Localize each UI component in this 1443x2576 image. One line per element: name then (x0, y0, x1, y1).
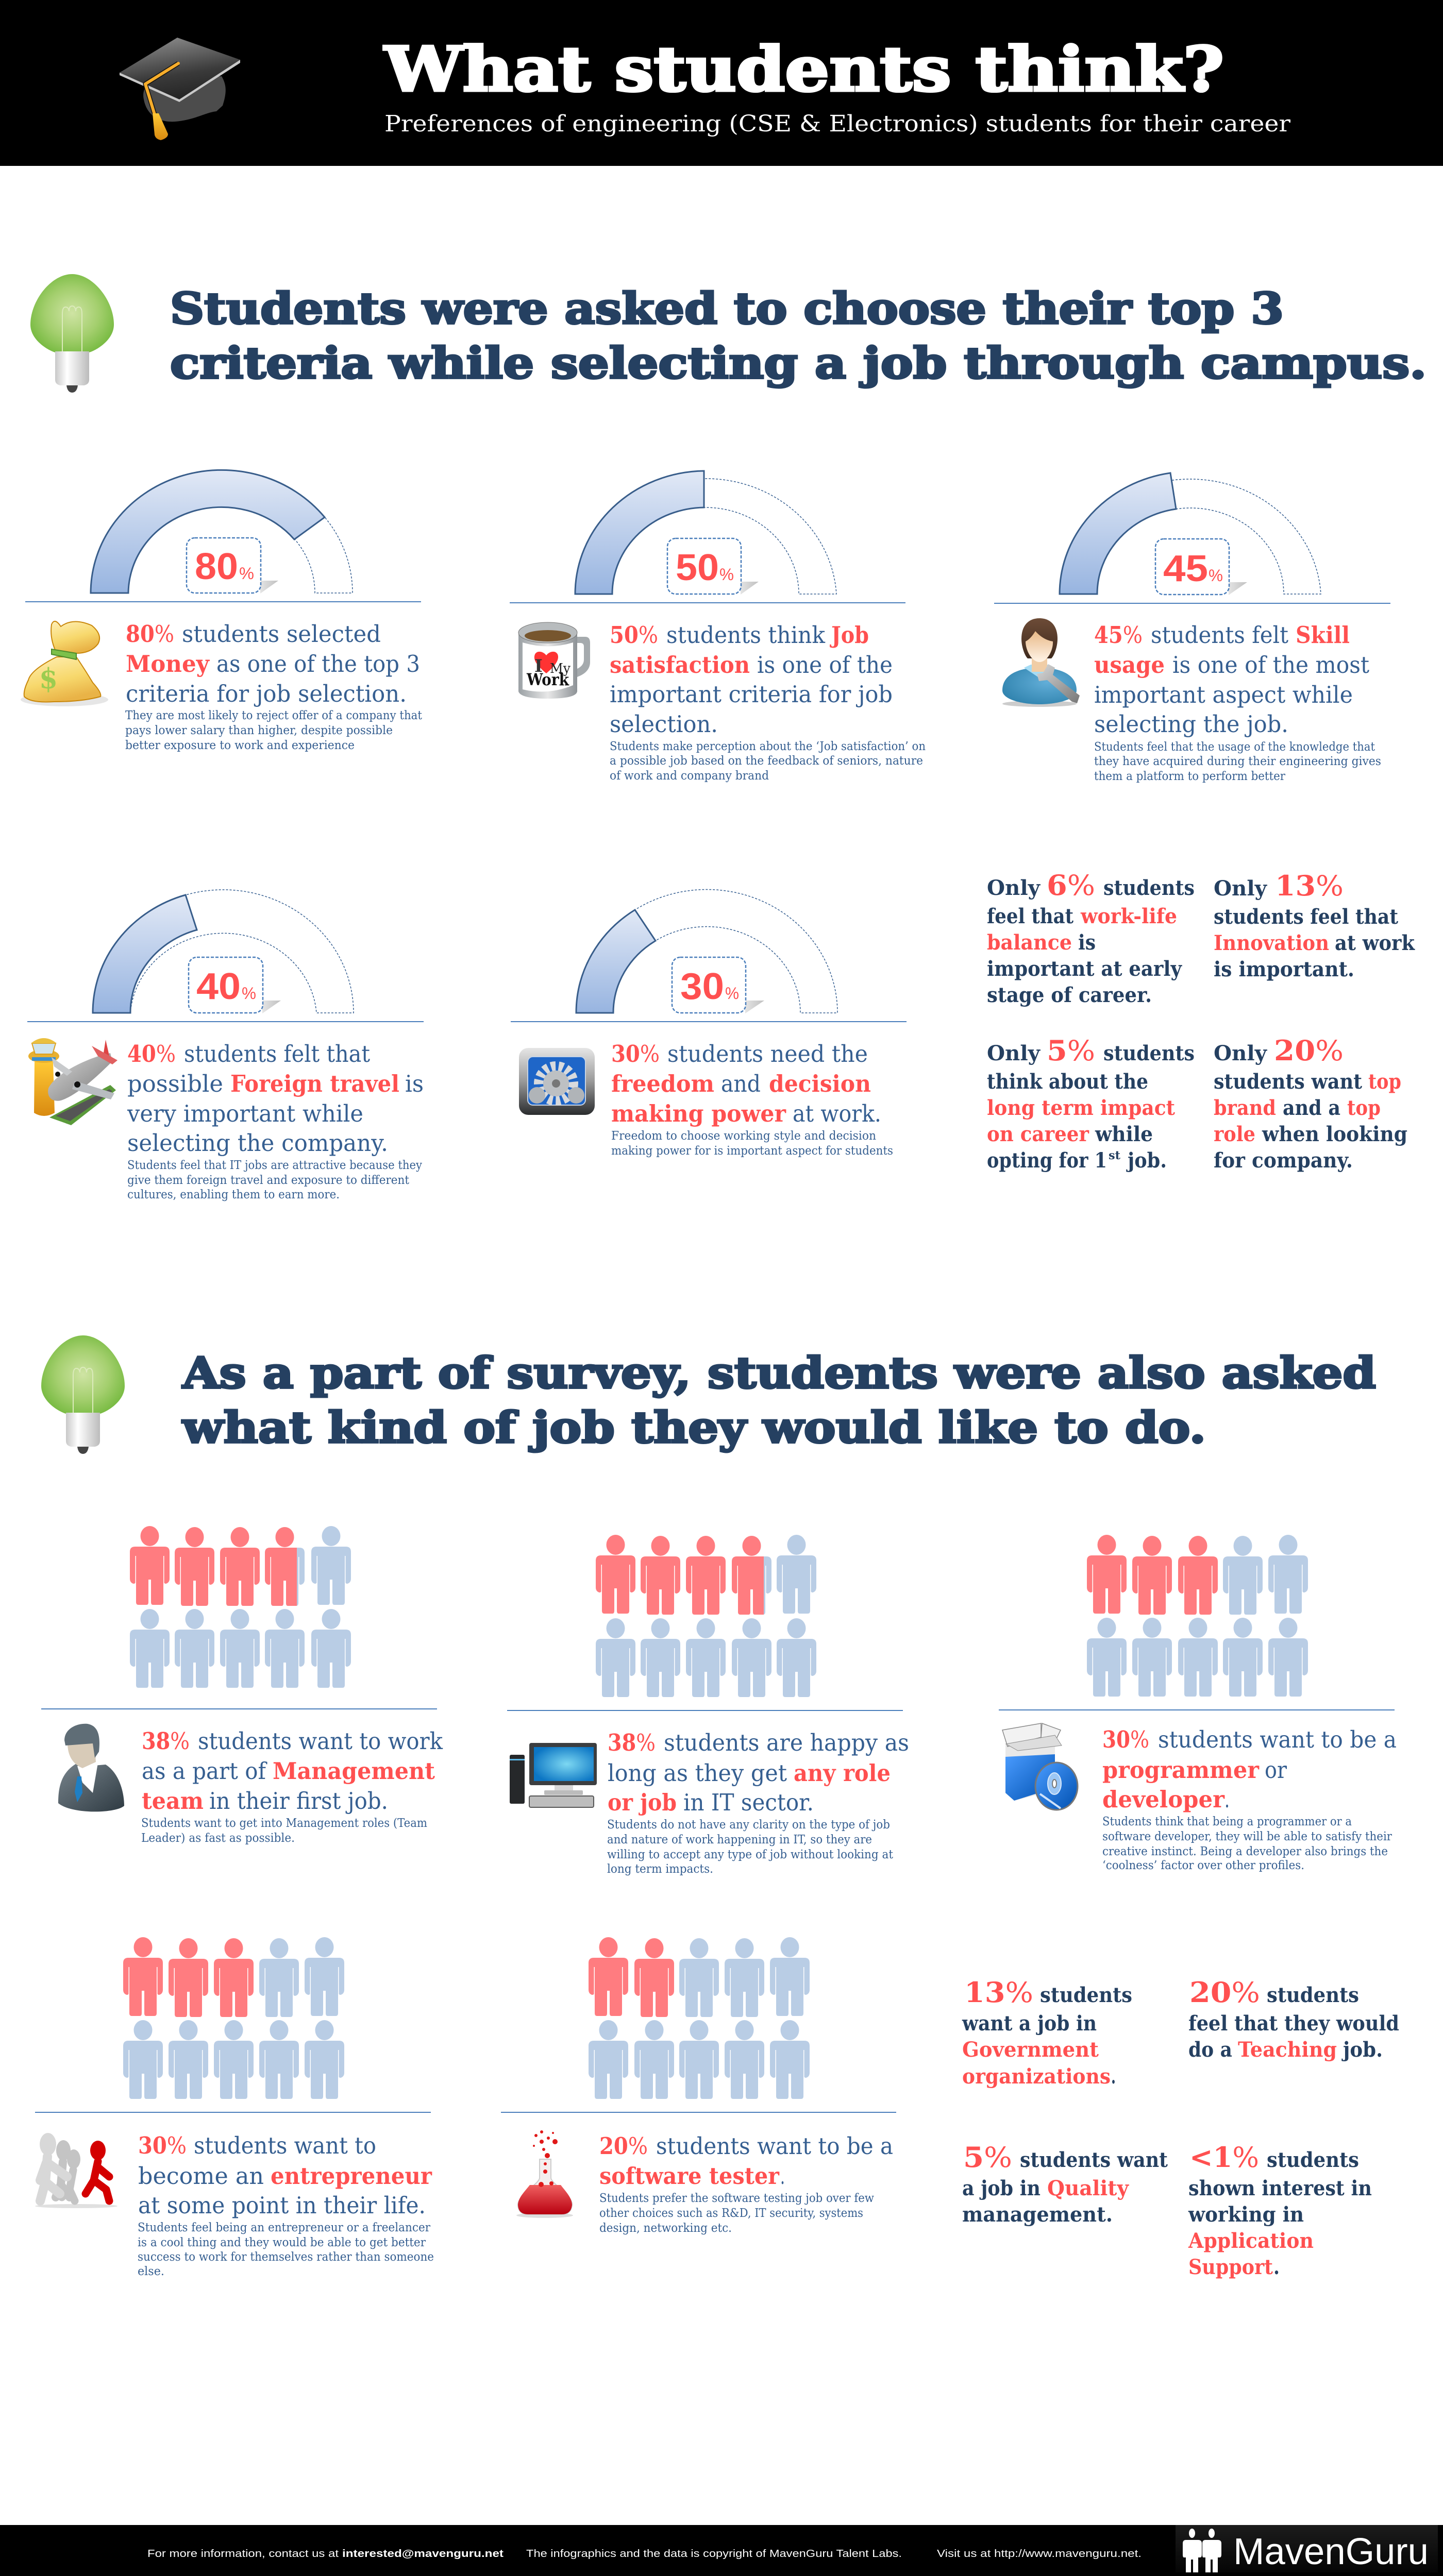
stat: 13% innovation: at work (1335, 931, 1415, 955)
text: 40% foreign travel: selecting the company. (127, 1129, 388, 1157)
title: What students think? (383, 33, 1224, 106)
text: 50% job satisfaction: satisfaction (610, 651, 750, 679)
pictogram 38% (130, 1526, 351, 1688)
text: 38% any role: Students do not have any clarity on the type of job (607, 1818, 890, 1832)
gauge 45%: % (1209, 566, 1223, 585)
text: 20% software tester: software tester (599, 2162, 780, 2190)
text: 38% management: students want to work (198, 1727, 443, 1755)
text: 80% money: pays lower salary than higher, despite possible (125, 724, 393, 737)
text: 80% money: Money (126, 650, 210, 677)
panel: skill usage 45% (994, 473, 1390, 783)
stat: under 1% application support: <1% (1189, 2141, 1259, 2174)
text: 38% any role: students are happy as (664, 1729, 909, 1756)
stat: 5% quality: management. (962, 2202, 1113, 2227)
gauge 80%: 80 (195, 546, 238, 587)
footer contact text: For more information, contact us at (147, 2548, 339, 2560)
text: 38% management: 38% (142, 1727, 190, 1755)
text: 80% money: They are most likely to reject offer of a company that (125, 709, 423, 722)
text: 40% foreign travel: very important while (127, 1100, 363, 1127)
text: 80% money: as one of the top 3 (216, 650, 420, 677)
icon: airplane and control tower (28, 1038, 118, 1125)
text: 30% programmer: programmer (1102, 1756, 1260, 1784)
text: 45% skill usage: they have acquired during their engineering gives (1094, 755, 1381, 768)
stat: 5% quality (962, 2141, 1168, 2227)
stat: under 1% application support: Application (1188, 2229, 1314, 2253)
text: 30% entrepreneur: 30% (138, 2132, 187, 2159)
stat: 20% teaching (1188, 1976, 1399, 2062)
text: 30% programmer: students want to be a (1158, 1726, 1397, 1753)
stat: 6% work-life balance: is (1078, 930, 1096, 955)
footer band (0, 2525, 1443, 2576)
pictogram 30% (1087, 1535, 1308, 1697)
stat: 20% teaching: students (1267, 1983, 1359, 2007)
stat: 5% long term impact: think about the (987, 1070, 1148, 1094)
panel: any role 38% (507, 1535, 909, 1876)
panel: freedom 30% (511, 890, 907, 1158)
stat: 13% innovation: is important. (1214, 957, 1354, 981)
heading text: what kind of job they would like to do. (182, 1402, 1206, 1453)
stat: 13% innovation: Only (1214, 876, 1268, 901)
text: 45% skill usage: Students feel that the usage of the knowledge that (1094, 740, 1375, 754)
stat: under 1% application support (1188, 2141, 1372, 2279)
text: 38% any role: in IT sector. (683, 1789, 814, 1816)
text: 50% job satisfaction: 50% (610, 621, 658, 649)
stat: 6% work-life balance: work-life (1080, 904, 1177, 928)
text: 30% entrepreneur: Students feel being an entrepreneur or a freelancer (138, 2221, 430, 2234)
stat: 5% long term impact: Only (987, 1041, 1041, 1065)
gauge 30% (576, 890, 837, 1013)
text: 30% programmer: software developer, they will be able to satisfy their (1102, 1830, 1392, 1843)
icon: coffee mug (518, 622, 590, 699)
stat: 5% long term impact: opting for 1 (987, 1148, 1107, 1173)
panel: job satisfaction 50% (510, 471, 926, 783)
text: 50% job satisfaction: is one of the (757, 651, 893, 679)
heading text (170, 283, 1427, 388)
text: 30% programmer: creative instinct. Being a developer also brings the (1102, 1845, 1388, 1858)
panel: money 80% (21, 470, 423, 752)
text: 38% management: Management (273, 1757, 435, 1785)
text: 45% skill usage: students felt (1151, 621, 1288, 649)
text: 50% job satisfaction: Job (829, 621, 869, 649)
text: 38% management: as a part of (142, 1757, 267, 1785)
stat: 6% work-life balance: 6% (1047, 869, 1095, 902)
panel: foreign travel 40% (27, 890, 424, 1201)
stat: 6% work-life balance: feel that (987, 904, 1073, 928)
text: 30% entrepreneur: students want to (194, 2132, 376, 2159)
text: 38% any role: or job (608, 1789, 677, 1816)
text: 30% freedom: 30% (611, 1040, 660, 1067)
text: 38% any role: any role (794, 1759, 891, 1787)
section heading: criteria (30, 274, 1427, 393)
heading text: criteria while selecting a job through campus. (170, 338, 1427, 388)
text: 40% foreign travel: 40% (127, 1040, 176, 1067)
stat: 13% government: want a job in (962, 2011, 1097, 2036)
text: 38% any role: and nature of work happening in IT, so they are (607, 1833, 872, 1846)
text: 30% programmer: . (1224, 1786, 1230, 1813)
gauge 50% (575, 471, 836, 595)
footer contact text (147, 2548, 504, 2560)
text: 30% programmer (1102, 1726, 1397, 1872)
stat: 20% top brand: top (1368, 1070, 1401, 1094)
text: 30% entrepreneur: entrepreneur (271, 2162, 432, 2190)
icon: chemical flask (516, 2130, 573, 2218)
text: 38% management: team (142, 1787, 204, 1815)
stat: 20% top brand: brand (1214, 1096, 1276, 1120)
icon: graduation cap (120, 38, 240, 140)
stat: 5% long term impact (987, 1034, 1195, 1173)
text: 20% software tester: Students prefer the software testing job over few (599, 2192, 874, 2205)
icon: green light bulb (41, 1335, 125, 1454)
stat: 20% top brand: 20% (1274, 1034, 1344, 1067)
icon: coffee mug: Work (526, 670, 569, 689)
stat: under 1% application support: students (1267, 2148, 1359, 2172)
text: 20% software tester: . (780, 2162, 785, 2190)
text: 80% money: 80% (126, 620, 174, 648)
text: 20% software tester (599, 2132, 893, 2235)
text: 40% foreign travel: Students feel that IT jobs are attractive because they (127, 1159, 422, 1172)
text: 40% foreign travel: Foreign travel (230, 1070, 399, 1097)
text: 30% entrepreneur: at some point in their life. (138, 2192, 426, 2219)
gauge 50%: 50 (676, 547, 719, 588)
text: 45% skill usage: Skill (1296, 621, 1350, 649)
text: 20% software tester: other choices such as R&D, IT security, systems (599, 2207, 863, 2220)
stat: 5% long term impact: on career (987, 1122, 1089, 1146)
text: 30% freedom: Freedom to choose working style and decision (611, 1129, 876, 1143)
icon: coffee mug: I (534, 656, 543, 676)
icon: manager in suit (58, 1724, 124, 1811)
text: 38% management: in their first job. (209, 1787, 388, 1815)
footer contact text: interested@mavenguru.net (342, 2548, 504, 2560)
text: 30% programmer: Students think that being a programmer or a (1102, 1815, 1352, 1828)
text: 30% programmer: developer (1102, 1786, 1225, 1813)
section heading: kind of job (41, 1335, 1376, 1454)
icon: person with wrench (1002, 618, 1080, 707)
panel: management 38% (41, 1526, 443, 1845)
text: 38% management (141, 1727, 443, 1845)
stat: 20% teaching: feel that they would (1188, 2011, 1399, 2036)
text: 80% money: students selected (182, 620, 381, 648)
stat: 20% top brand: when looking (1262, 1122, 1407, 1146)
pictogram 38% (596, 1535, 816, 1697)
text: 30% freedom: at work. (793, 1100, 881, 1127)
gauge 80%: % (239, 564, 254, 583)
text: 30% freedom: making power for is important aspect for students (611, 1144, 893, 1158)
gauge 40%: % (242, 984, 256, 1003)
stat: 5% quality: a job in (962, 2176, 1041, 2200)
stat: 13% government: 13% (964, 1976, 1033, 2009)
text: 80% money: criteria for job selection. (126, 680, 407, 707)
text: 50% job satisfaction (610, 621, 926, 783)
stat: under 1% application support: shown interest in (1188, 2176, 1372, 2200)
icon: runners (35, 2133, 118, 2208)
stat: under 1% application support: Support (1188, 2255, 1273, 2279)
text: 40% foreign travel: possible (127, 1070, 223, 1097)
icon: money bag (21, 621, 108, 706)
text: 20% software tester: students want to be a (656, 2132, 893, 2160)
text: 30% programmer: ‘coolness’ factor over other profiles. (1102, 1859, 1304, 1872)
stat: 6% work-life balance: important at early (987, 957, 1183, 981)
text: 30% entrepreneur: success to work for themselves rather than someone (138, 2250, 434, 2264)
stat: 5% long term impact: students (1103, 1041, 1195, 1065)
text: 38% any role: long as they get (608, 1759, 787, 1787)
text: 30% entrepreneur: else. (138, 2265, 164, 2278)
text: 30% entrepreneur: is a cool thing and they would be able to get better (138, 2236, 426, 2249)
stat: 6% work-life balance: stage of career. (987, 983, 1152, 1007)
pictogram 20% (589, 1937, 810, 2099)
stat: 13% innovation: 13% (1275, 869, 1344, 902)
stat: 5% quality: 5% (963, 2141, 1012, 2174)
logo: MavenGuru (1176, 2525, 1438, 2572)
text: 40% foreign travel: give them foreign travel and exposure to different (127, 1174, 410, 1187)
text: 30% freedom: decision (769, 1070, 871, 1097)
icon: software box and disc (1002, 1723, 1078, 1810)
heading text: As a part of survey, students were also asked (182, 1348, 1376, 1398)
stat: 20% teaching: Teaching (1238, 2038, 1337, 2062)
text: 20% software tester: 20% (599, 2132, 648, 2160)
stat: 5% long term impact: long term impact (987, 1096, 1175, 1120)
panel: software tester 20% (501, 1937, 896, 2235)
text: 45% skill usage: them a platform to perform better (1094, 770, 1285, 783)
stat: 20% top brand: top (1347, 1096, 1381, 1120)
text: 30% freedom (611, 1040, 893, 1158)
stat: 6% work-life balance: students (1103, 876, 1195, 900)
text: 50% job satisfaction: students think (666, 621, 826, 649)
text: 45% skill usage: selecting the job. (1094, 710, 1288, 738)
text: 45% skill usage: usage (1094, 651, 1165, 679)
stat: 13% innovation (1214, 869, 1415, 981)
stat: 5% long term impact: job. (1126, 1148, 1167, 1173)
text: 30% entrepreneur (138, 2132, 434, 2278)
stat: 13% government (962, 1976, 1132, 2089)
gauge 50%: % (719, 565, 734, 584)
stat: 6% work-life balance: balance (987, 930, 1072, 955)
text: 38% any role: willing to accept any type of job without looking at (607, 1848, 894, 1861)
text: 38% any role: long term impacts. (607, 1862, 713, 1876)
stats: other job preferences (962, 1976, 1399, 2279)
stat: 6% work-life balance: Only (987, 876, 1041, 900)
text: 30% freedom: freedom (611, 1070, 714, 1097)
gauge 45%: 45 (1163, 548, 1208, 589)
text: 50% job satisfaction: of work and company brand (610, 769, 769, 783)
text: 38% management: Students want to get into Management roles (Team (141, 1817, 427, 1830)
header band (0, 0, 1443, 166)
gauge 30%: 30 (680, 966, 724, 1007)
stat: 20% top brand (1214, 1034, 1407, 1173)
stat: 20% teaching: 20% (1189, 1976, 1260, 2009)
text: 45% skill usage: 45% (1094, 621, 1143, 649)
stat: 20% teaching: job. (1341, 2038, 1383, 2062)
stat: 13% government: . (1111, 2064, 1116, 2089)
icon: money bag: $ (39, 662, 58, 695)
text: 45% skill usage: is one of the most (1172, 651, 1369, 679)
text: 45% skill usage: important aspect while (1094, 681, 1353, 708)
icon: green light bulb (30, 274, 114, 393)
gauge 40%: 40 (196, 966, 241, 1007)
text: 30% freedom: making power (611, 1100, 786, 1127)
icon: coffee mug: My (550, 661, 571, 676)
stat: 6% work-life balance (987, 869, 1195, 1007)
pictogram 30% (123, 1937, 344, 2099)
text: 50% job satisfaction: selection. (610, 710, 718, 738)
icon: desktop computer (510, 1743, 597, 1807)
text: 30% freedom: and (721, 1070, 761, 1097)
text: 38% any role (607, 1729, 909, 1876)
icon: settings gear (519, 1048, 595, 1115)
stat: 5% quality: students want (1020, 2148, 1168, 2172)
stat: 5% long term impact: while (1095, 1122, 1153, 1146)
text: 50% job satisfaction: important criteria for job (610, 681, 893, 708)
stat: 20% top brand: role (1214, 1122, 1255, 1146)
gauge 80% (91, 470, 353, 594)
text: 50% job satisfaction: a possible job based on the feedback of seniors, nature (610, 754, 923, 768)
stat: 5% long term impact: 5% (1047, 1034, 1095, 1067)
text: 50% job satisfaction: Students make perception about the ‘Job satisfaction’ on (610, 740, 926, 753)
stat: 20% top brand: for company. (1214, 1148, 1353, 1173)
text: 80% money (125, 620, 423, 752)
panel: programmer 30% (999, 1535, 1397, 1872)
stat: 20% top brand: and a (1283, 1096, 1340, 1120)
stat: 5% long term impact: st (1109, 1149, 1121, 1162)
subtitle: Preferences of engineering (CSE & Electronics) students for their career (384, 111, 1291, 137)
gauge 45% (1060, 473, 1321, 595)
gauge 40% (93, 890, 354, 1013)
heading text: Students were asked to choose their top 3 (170, 283, 1284, 334)
stat: 13% government: Government (962, 2038, 1099, 2062)
footer copyright text: The infographics and the data is copyright of MavenGuru Talent Labs. (526, 2548, 902, 2560)
text: 20% software tester: design, networking etc. (599, 2222, 732, 2235)
text: 30% programmer: 30% (1102, 1726, 1149, 1753)
stat: under 1% application support: working in (1188, 2202, 1304, 2227)
text: 40% foreign travel: students felt that (184, 1040, 370, 1067)
stats: low-priority criteria (987, 869, 1415, 1173)
text: 30% freedom: students need the (667, 1040, 868, 1067)
stat: 13% innovation: Innovation (1214, 931, 1329, 955)
text: 80% money: better exposure to work and experience (125, 739, 355, 752)
text: 38% any role: 38% (608, 1729, 656, 1756)
text: 40% foreign travel (127, 1040, 424, 1201)
stat: 13% government: organizations (962, 2064, 1111, 2089)
stat: 20% top brand: students want (1214, 1070, 1362, 1094)
text: 45% skill usage (1094, 621, 1381, 783)
stat: under 1% application support: . (1273, 2255, 1280, 2279)
text: 40% foreign travel: cultures, enabling them to earn more. (127, 1188, 340, 1201)
text: 40% foreign travel: is (405, 1070, 424, 1097)
gauge 30%: % (725, 984, 739, 1003)
logo: MavenGuru: MavenGuru (1233, 2531, 1429, 2572)
stat: 13% innovation: students feel that (1214, 905, 1398, 929)
stat: 20% teaching: do a (1188, 2038, 1232, 2062)
stat: 13% government: students (1040, 1983, 1132, 2007)
stat: 20% top brand: Only (1214, 1041, 1268, 1065)
text: 38% management: Leader) as fast as possible. (141, 1832, 295, 1845)
text: 30% entrepreneur: become an (138, 2162, 264, 2190)
footer website text: Visit us at http://www.mavenguru.net. (937, 2548, 1142, 2560)
text: 30% programmer: or (1265, 1756, 1287, 1784)
heading text (182, 1348, 1376, 1453)
panel: entrepreneur 30% (35, 1937, 434, 2278)
stat: 5% quality: Quality (1047, 2176, 1130, 2200)
